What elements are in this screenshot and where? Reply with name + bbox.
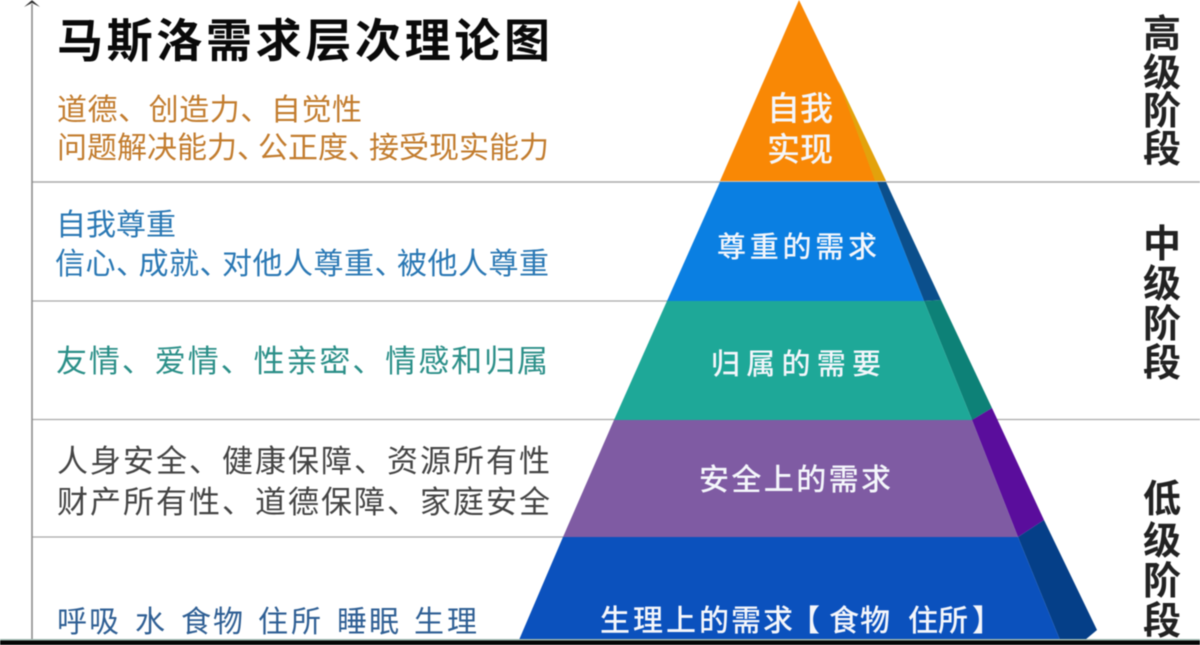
stage label: intermediate: 段	[1143, 343, 1181, 385]
stage label: basic: 阶	[1143, 561, 1181, 603]
axis arrow	[24, 0, 40, 640]
stage label: advanced	[1143, 14, 1181, 171]
stage label: intermediate: 中	[1143, 224, 1181, 266]
tier: esteem	[667, 182, 941, 301]
tier: safety	[563, 408, 1044, 537]
stage label: intermediate: 级	[1143, 264, 1181, 306]
tier: belonging	[614, 300, 992, 420]
text block: esteem traits	[55, 209, 550, 281]
stage label: intermediate	[1143, 224, 1181, 385]
stage label: advanced: 高	[1143, 14, 1181, 56]
tier: physiological	[519, 520, 1097, 640]
stage label: advanced: 级	[1143, 53, 1181, 95]
stage label: advanced: 段	[1143, 129, 1181, 171]
stage label: basic	[1143, 479, 1181, 643]
text block: safety traits: 人身安全、健康保障、资源所有性	[57, 444, 550, 479]
pyramid	[519, 0, 1097, 640]
tier: physiological: 生理上的需求【食物 住所】	[600, 605, 1002, 638]
text block: safety traits: 财产所有性、道德保障、家庭安全	[57, 485, 550, 520]
text block: safety traits	[57, 444, 550, 520]
stage label: basic: 低	[1143, 479, 1181, 521]
text block: belonging traits: 友情、爱情、性亲密、情感和归属	[56, 344, 548, 379]
stage label: advanced: 阶	[1143, 91, 1181, 133]
text block: self-actualization traits	[57, 94, 549, 165]
stage label: intermediate: 阶	[1143, 304, 1181, 346]
tier: esteem: 尊重的需求	[717, 231, 877, 264]
title: 马斯洛需求层次理论图	[57, 15, 550, 67]
tier: belonging: 归属的需要	[711, 348, 881, 381]
stage label: basic: 级	[1143, 521, 1181, 563]
text block: esteem traits: 自我尊重	[56, 209, 176, 242]
tier: self-actualization	[720, 0, 886, 181]
text block: self-actualization traits: 问题解决能力、公正度、接受现实能力	[57, 132, 549, 165]
stage label: basic: 段	[1143, 601, 1181, 643]
tier: self-actualization: 自我	[767, 90, 833, 127]
text block: esteem traits: 信心、成就、对他人尊重、被他人尊重	[55, 248, 550, 281]
tier: self-actualization: 实现	[767, 131, 833, 168]
tier: safety: 安全上的需求	[699, 464, 891, 497]
text block: self-actualization traits: 道德、创造力、自觉性	[57, 94, 362, 127]
text block: physiological needs: 呼吸 水 食物 住所 睡眠 生理	[57, 606, 477, 639]
